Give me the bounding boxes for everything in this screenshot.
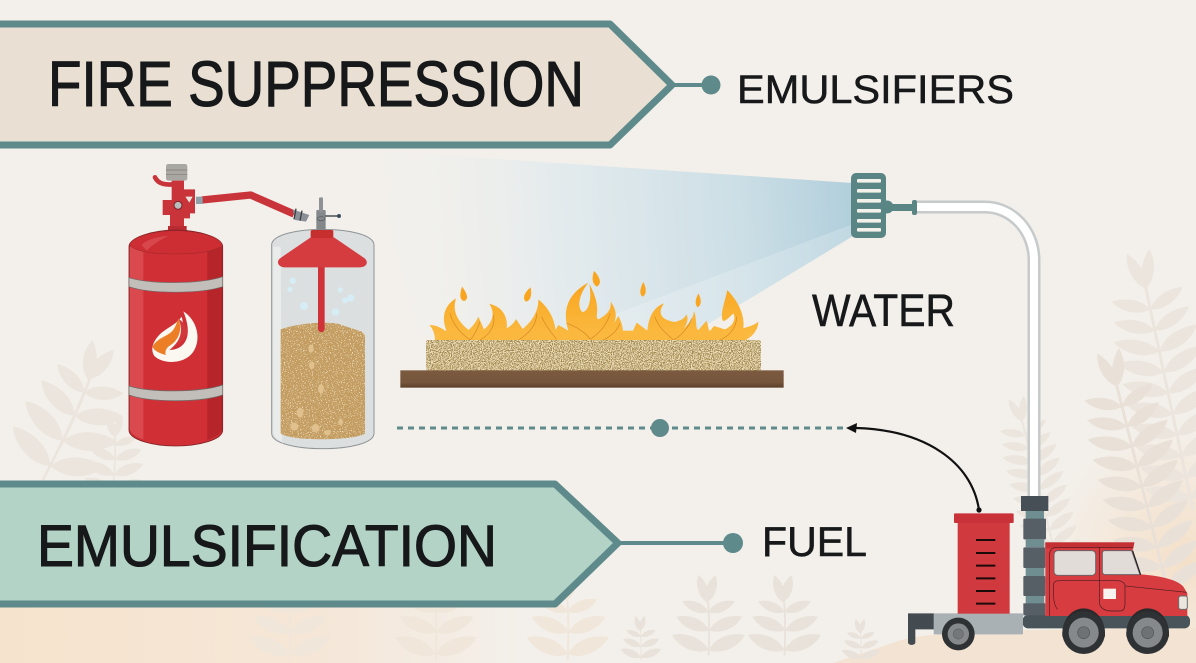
sand fill <box>281 323 365 439</box>
background foliage and warm ground <box>0 242 1196 663</box>
icon: glass chamber with sand fuel and red sprinkler <box>272 197 374 449</box>
label: emulsifiers: EMULSIFIERS <box>737 68 1014 112</box>
icon: red fire truck with fuel tank <box>908 496 1190 654</box>
wheels <box>942 608 1169 654</box>
icon: teal spray nozzle <box>851 173 917 238</box>
sparks <box>460 271 701 307</box>
chassis <box>908 613 934 645</box>
label: fuel: FUEL <box>762 518 867 565</box>
icon: red fire extinguisher cylinder and hose <box>129 164 309 446</box>
stacked pump column <box>1021 496 1048 615</box>
flames and sand fuel bed on wooden board <box>400 271 784 388</box>
hose <box>202 195 294 214</box>
white water pipe <box>917 207 1034 497</box>
glass cylinder <box>272 229 374 449</box>
banner: fire suppression <box>0 24 672 145</box>
sprinkler head <box>316 210 326 230</box>
cylinder bands <box>129 277 223 292</box>
flame emblem <box>152 311 198 362</box>
label: water: WATER <box>812 285 955 336</box>
flames <box>429 283 758 342</box>
heading: emulsification: EMULSIFICATION <box>37 514 497 579</box>
bubbles <box>287 277 354 316</box>
heading: fire suppression: FIRE SUPPRESSION <box>48 48 584 120</box>
sand block <box>426 340 761 371</box>
water spray cone <box>365 150 853 335</box>
fuel tank <box>958 522 1010 614</box>
truck cab <box>1045 542 1187 616</box>
cylinder body <box>129 230 223 446</box>
curved arrow from fuel tank to dotted line <box>846 423 982 513</box>
wooden board <box>400 370 784 388</box>
connector: emulsification to fuel <box>618 533 743 553</box>
connector: fire suppression to emulsifiers <box>672 76 720 94</box>
dotted line with centre dot <box>397 419 845 437</box>
sprinkler deflector and stem <box>318 267 325 332</box>
valve <box>166 164 187 181</box>
banner: emulsification <box>0 484 618 604</box>
